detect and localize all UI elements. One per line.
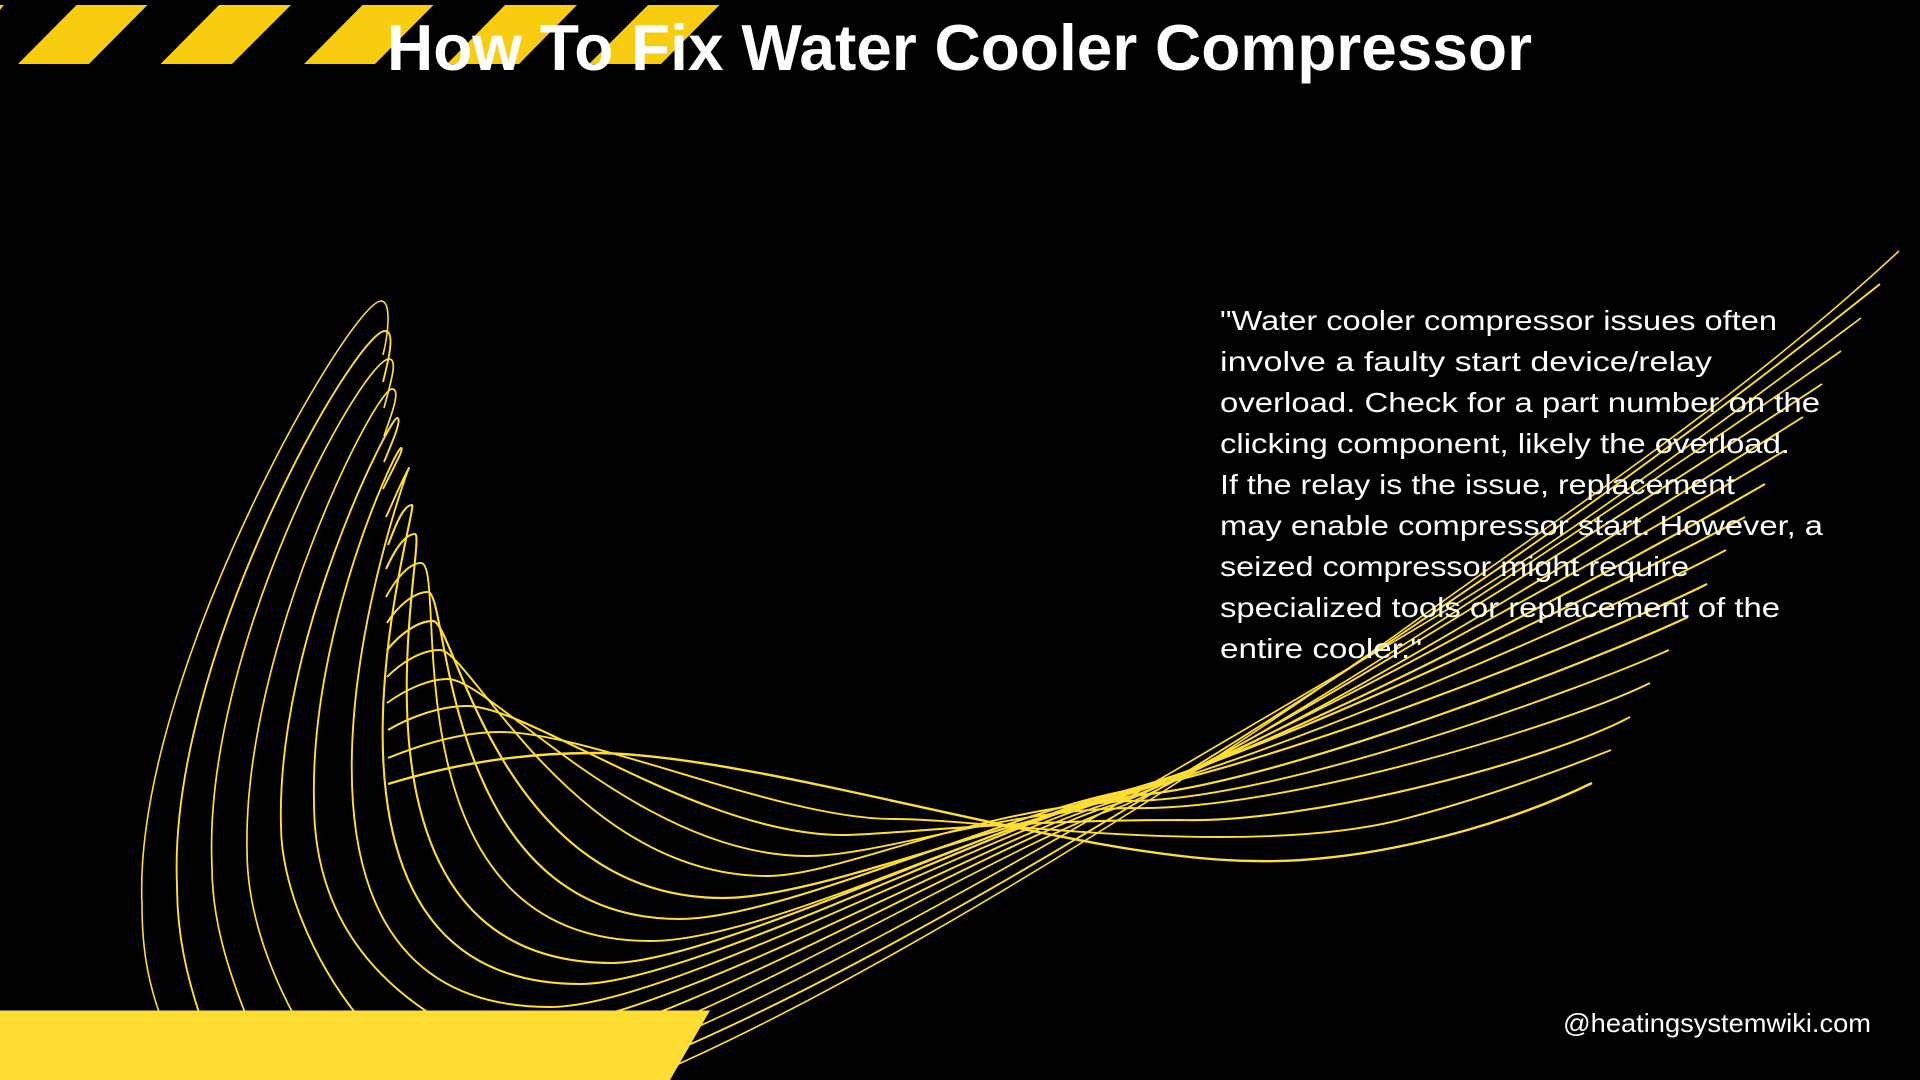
title: How To Fix Water Cooler Compressor [387,11,1532,84]
quote text block: may enable compressor start. However, a [1220,510,1823,541]
website handle: @heatingsystemwiki.com [1563,1008,1871,1038]
quote text block: overload. Check for a part number on the [1220,387,1820,418]
wave line artwork [142,251,1899,1080]
quote text block: specialized tools or replacement of the [1220,592,1780,623]
quote text block [1220,305,1823,664]
quote text block: entire cooler." [1220,633,1422,664]
quote text block: If the relay is the issue, replacement [1220,469,1735,500]
quote text block: "Water cooler compressor issues often [1220,305,1777,336]
bottom yellow bar [0,1010,710,1080]
quote text block: involve a faulty start device/relay [1220,346,1712,377]
quote text block: seized compressor might require [1220,551,1689,582]
quote text block: clicking component, likely the overload. [1220,428,1790,459]
hazard stripes [0,5,720,64]
